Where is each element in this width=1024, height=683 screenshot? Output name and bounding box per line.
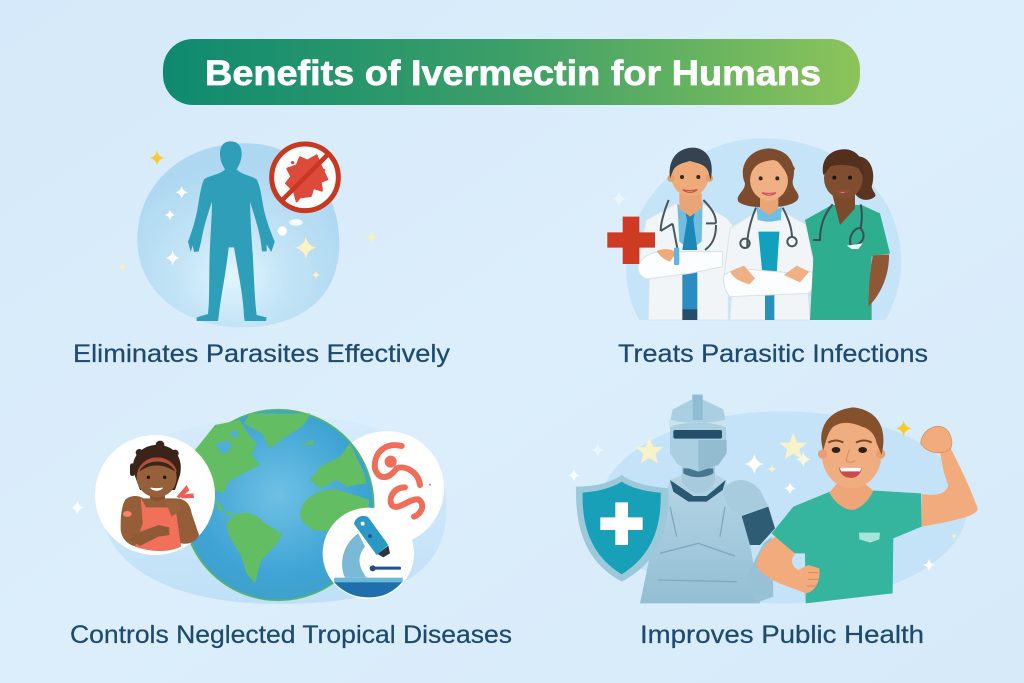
panel: eliminates parasites — [73, 141, 451, 368]
doctor: woman — [723, 148, 817, 320]
illustration: body and blocked parasite — [118, 141, 377, 327]
inset: worms — [329, 431, 444, 546]
caption: Improves Public Health — [640, 621, 924, 649]
nurse — [805, 149, 890, 320]
healthy man — [757, 407, 978, 603]
inset: microscope — [323, 508, 414, 599]
panel: public health — [568, 395, 978, 649]
panel: treats infections — [607, 138, 928, 368]
illustration: medical team — [607, 138, 901, 320]
caption: Controls Neglected Tropical Diseases — [70, 621, 512, 649]
caption: Eliminates Parasites Effectively — [73, 340, 451, 368]
panel: tropical diseases — [70, 410, 512, 649]
doctor: man — [638, 148, 732, 320]
icon: globe — [183, 410, 374, 600]
icon: shield with cross — [576, 475, 668, 582]
caption: Treats Parasitic Infections — [618, 340, 928, 368]
background stars — [568, 420, 957, 571]
title banner: Benefits of Ivermectin for Humans — [205, 54, 821, 93]
inset: child with rash — [95, 435, 215, 555]
title banner — [163, 39, 860, 105]
icon: human silhouette — [188, 141, 275, 321]
icon: blocked parasite sign — [272, 144, 338, 211]
icon: red cross — [607, 217, 655, 264]
illustration: globe with insets — [71, 410, 447, 604]
sparkles — [118, 151, 377, 279]
knight armor — [640, 395, 775, 603]
illustration: knight and healthy man — [568, 395, 978, 603]
